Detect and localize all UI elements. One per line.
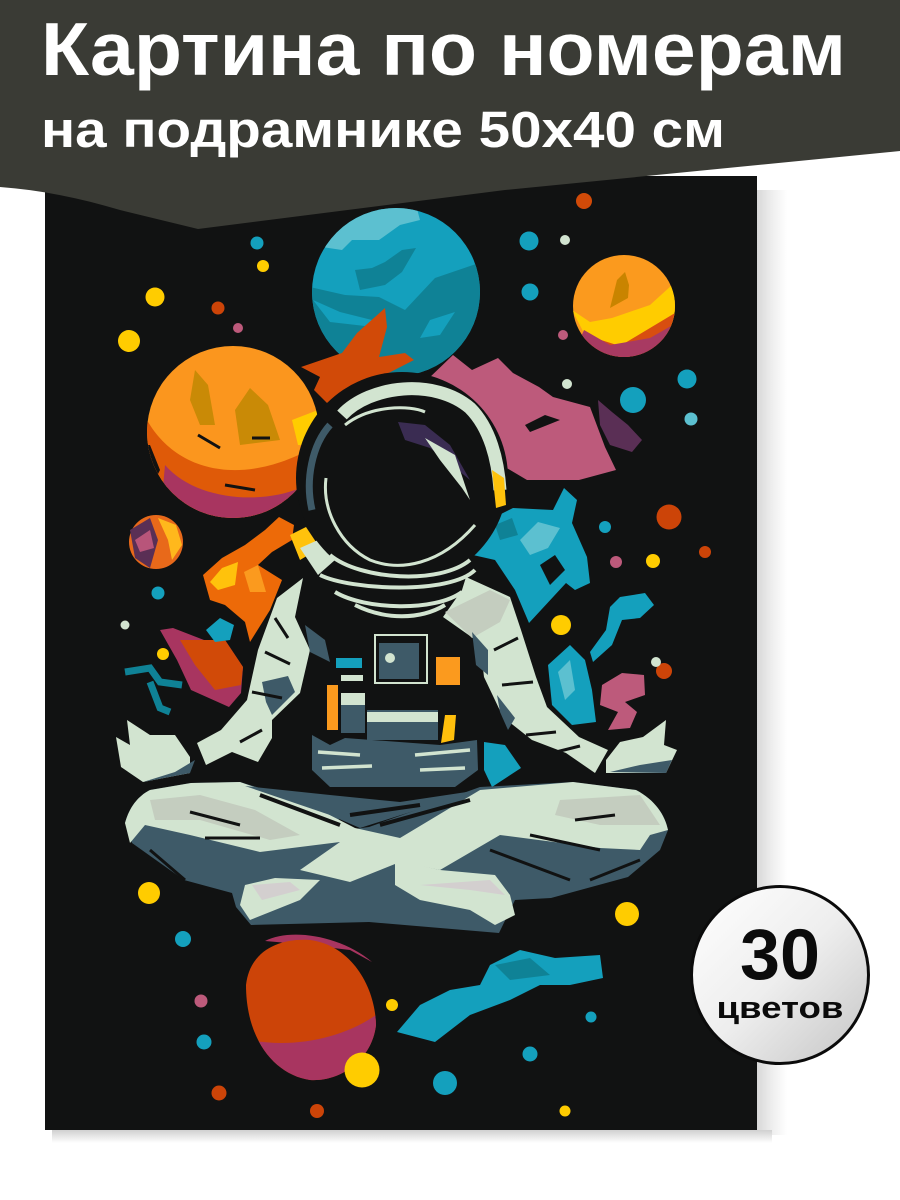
canvas side shadow: [52, 190, 787, 1143]
nebula: teal right: [464, 488, 590, 623]
painting canvas: [45, 176, 757, 1130]
nebula: orange over teal planet: [301, 308, 414, 403]
viewer-right hand: [606, 720, 677, 773]
title: Картина по номерам: [41, 7, 846, 91]
viewer-left hand: [116, 720, 190, 782]
planet: red bottom: [240, 935, 380, 1085]
legs: stripes: [150, 812, 640, 880]
nebula: red and teal left: [125, 618, 243, 712]
subtitle: на подрамнике 50х40 см: [41, 101, 725, 158]
viewer-right sleeve: [443, 577, 608, 773]
nebula: orange flame: [203, 517, 320, 642]
foot: [395, 860, 515, 925]
badge: 30 colours: [692, 886, 868, 1064]
header banner: [0, 0, 900, 229]
number: 30: [740, 916, 820, 995]
legs: centre dark fold: [245, 786, 480, 828]
planet: tiny orange left: [129, 515, 183, 569]
nebula: pink: [427, 355, 642, 480]
badge caption: цветов: [716, 990, 844, 1025]
planet: small orange top right: [573, 255, 675, 357]
helmet outer rim: [342, 389, 500, 490]
sleeve stripes: [240, 618, 580, 752]
chest panel: [327, 635, 460, 743]
paint dots: [118, 193, 711, 1118]
legs: upper light: [125, 782, 668, 882]
viewer-left sleeve: [197, 578, 310, 765]
crossed legs: dark underside: [125, 782, 668, 933]
collar block: [300, 540, 335, 575]
planet: large orange left: [145, 345, 321, 520]
belly shading: [312, 735, 478, 787]
astronaut: [116, 372, 677, 933]
legs: gray patches: [150, 795, 300, 840]
nebula: teal bottom: [397, 950, 603, 1042]
nebula: pink lower right: [600, 673, 645, 730]
visor ring: [325, 408, 475, 565]
nebula: teal lower right: [484, 593, 654, 787]
visor reflection: [398, 422, 470, 480]
helmet yellow clip: [492, 470, 506, 508]
planet: large teal: [310, 205, 482, 380]
sleeve shading: [262, 625, 515, 730]
shoulder highlight: [445, 590, 510, 638]
helmet: [296, 372, 508, 584]
neck rings: [320, 570, 475, 616]
